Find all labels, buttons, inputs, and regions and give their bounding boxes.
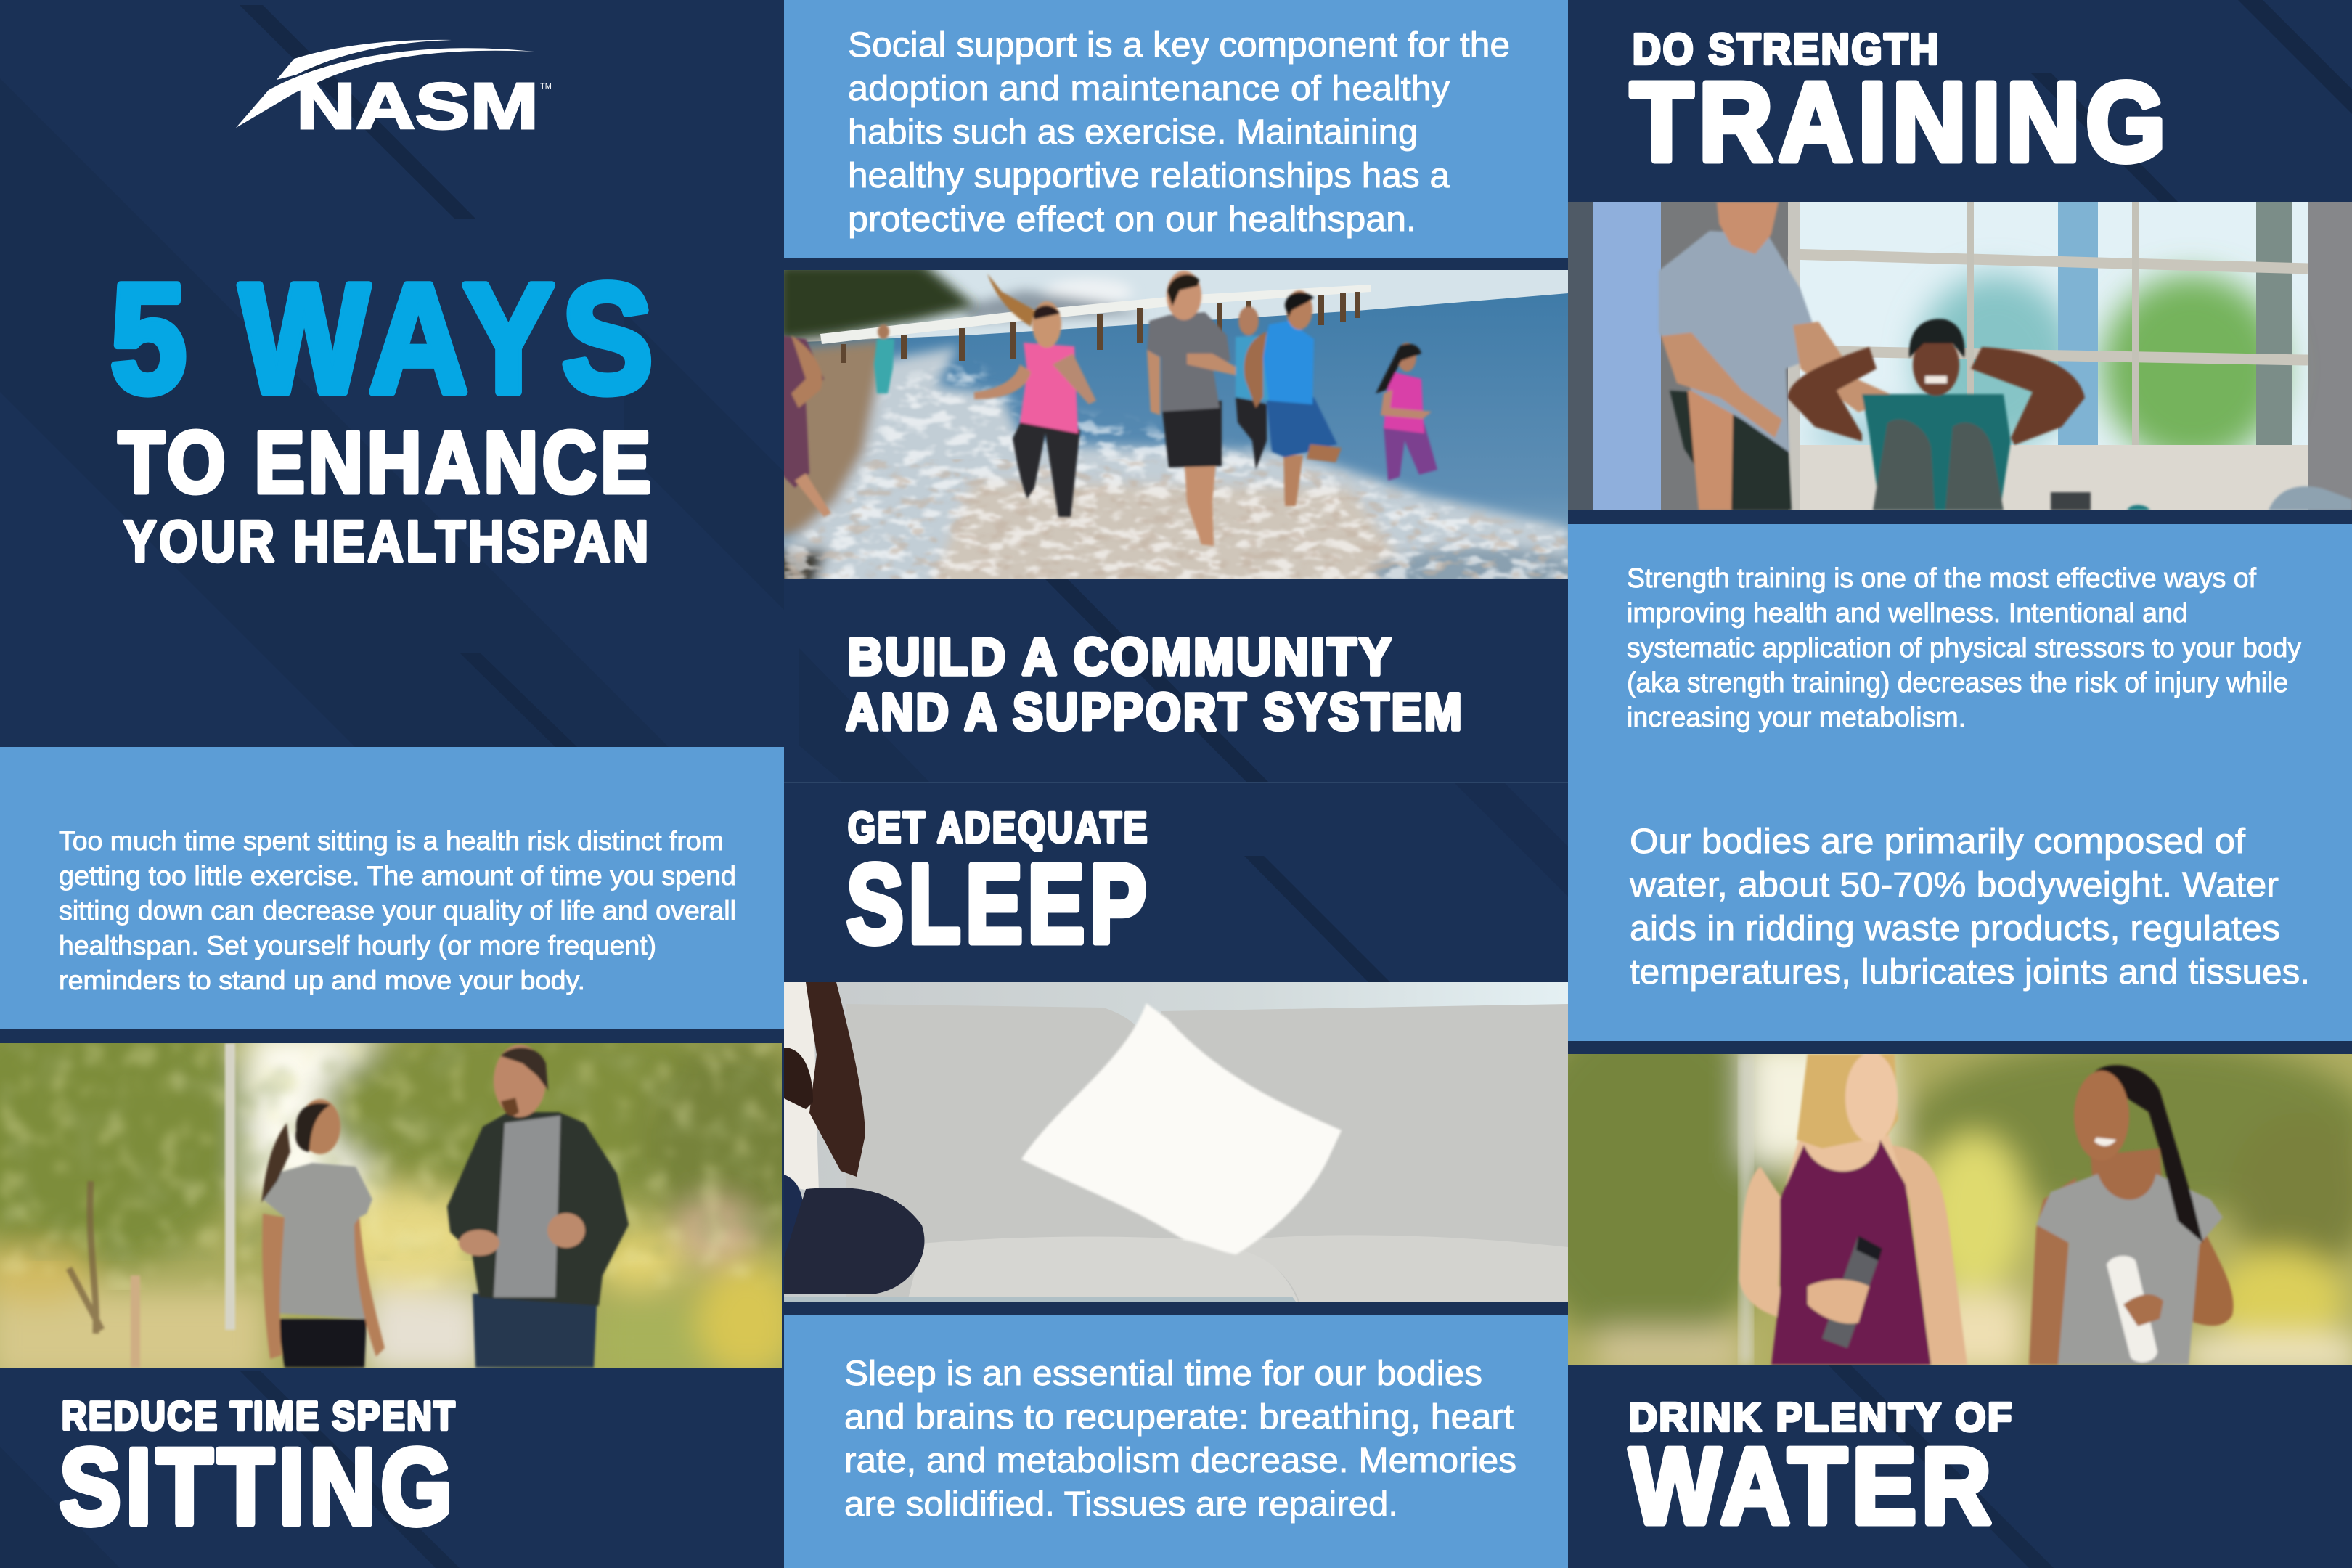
panel: sleep description [784,1302,1568,1568]
person: woman in grey [2029,1065,2234,1365]
photo: two women with water bottles [1568,1054,2352,1365]
person: runner behind in teal [1236,306,1269,470]
panel: sleep description: Sleep is an essential time for our bodies [844,1355,1482,1393]
logo: NASM [236,40,552,143]
panel: water description: water, about 50-70% bodyweight. Water [1629,866,2279,905]
panel: strength training heading: DO STRENGTH [1633,25,1940,73]
panel: strength training description: increasing your metabolism. [1627,703,1966,733]
panel: sleep heading: GET ADEQUATE [848,804,1149,852]
person: woman in purple [1739,1053,1967,1365]
panel: sitting description: sitting down can decrease your quality of life and overall [59,896,736,926]
person: woman doing sit-ups [1787,319,2085,510]
panel: sitting description [0,747,784,1029]
logo: NASM: NASM [296,70,539,143]
heading: water: WATER [1630,1426,1996,1546]
panel: sleep description: rate, and metabolism decrease. Memories [844,1442,1516,1480]
photo: group running on beach [784,270,1568,579]
sea foam [784,363,1568,579]
panel: strength training description: Strength training is one of the most effective ways of [1627,563,2256,594]
pier [820,285,1371,363]
panel: community description: habits such as exercise. Maintaining [848,113,1418,152]
logo: NASM: TM [540,82,552,91]
person: woman walking [261,1099,385,1368]
panel: sitting description: reminders to stand up and move your body. [59,965,585,995]
panel: community description: protective effect on our healthspan. [848,200,1416,239]
person: trainer [1659,202,1898,510]
person: man in grey shirt [1147,271,1238,546]
panel: sleep description: are solidified. Tissues are repaired. [844,1485,1398,1524]
heading: support system: AND A SUPPORT SYSTEM [846,684,1464,741]
panel: community description [784,0,1568,258]
panel: water description: Our bodies are primarily composed of [1630,822,2246,861]
panel: sleep heading [784,782,1568,982]
gym window [1788,202,2308,510]
panel: water description [1629,822,2310,992]
person: woman in magenta [1376,343,1437,481]
pillow [1021,1003,1342,1254]
photo: trainer with client doing sit-ups [1568,202,2352,510]
panel: strength training description: systematic application of physical stressors to your body [1627,633,2301,663]
person: woman in pink [974,274,1096,517]
heading: training: TRAINING [1630,60,2171,184]
person: man in blue tank [1244,290,1342,506]
panel: water heading: DRINK PLENTY OF [1629,1395,2014,1440]
title: 5 ways: 5 WAYS [110,252,661,425]
panel: strength training heading [1568,0,2352,202]
panel: community heading [784,579,1568,782]
person: man talking [447,1045,629,1368]
panel: sitting heading: REDUCE TIME SPENT [62,1393,457,1438]
panel: sitting description: getting too little exercise. The amount of time you spend [59,861,736,891]
title: your healthspan: YOUR HEALTHSPAN [123,509,651,573]
panel: community description: adoption and maintenance of healthy [848,70,1450,108]
panel: community description: healthy supportive relationships has a [848,157,1450,195]
heading: sleep: SLEEP [846,841,1151,966]
panel: strength training description [1568,510,2352,1041]
panel: water heading [1629,1365,2054,1568]
gym equipment [2051,486,2352,510]
panel: water description: aids in ridding waste products, regulates [1630,910,2280,948]
person: seated woman [784,982,925,1294]
panel: community description: Social support is a key component for the [848,26,1510,65]
person: far woman in teal [874,339,894,393]
person: left partial woman [780,335,831,517]
sofa [784,1004,1568,1302]
panel: strength training description: (aka strength training) decreases the risk of injury while [1627,668,2288,698]
photo: man and woman walking in park [0,1043,782,1368]
panel: sitting heading [0,1371,460,1568]
photo: woman on sofa with pillow [784,982,1568,1302]
panel: water description: temperatures, lubricates joints and tissues. [1630,953,2310,992]
panel: community heading: BUILD A COMMUNITY [848,629,1394,686]
panel: title [0,0,784,747]
panel: sitting description: Too much time spent sitting is a health risk distinct from [59,826,724,856]
title: to enhance: TO ENHANCE [118,414,655,511]
panel: strength training description: improving health and wellness. Intentional and [1627,598,2188,629]
panel: sleep description: and brains to recuperate: breathing, heart [844,1398,1514,1437]
heading: sitting: SITTING [60,1427,457,1547]
panel: sitting description: healthspan. Set yourself hourly (or more frequent) [59,931,656,960]
